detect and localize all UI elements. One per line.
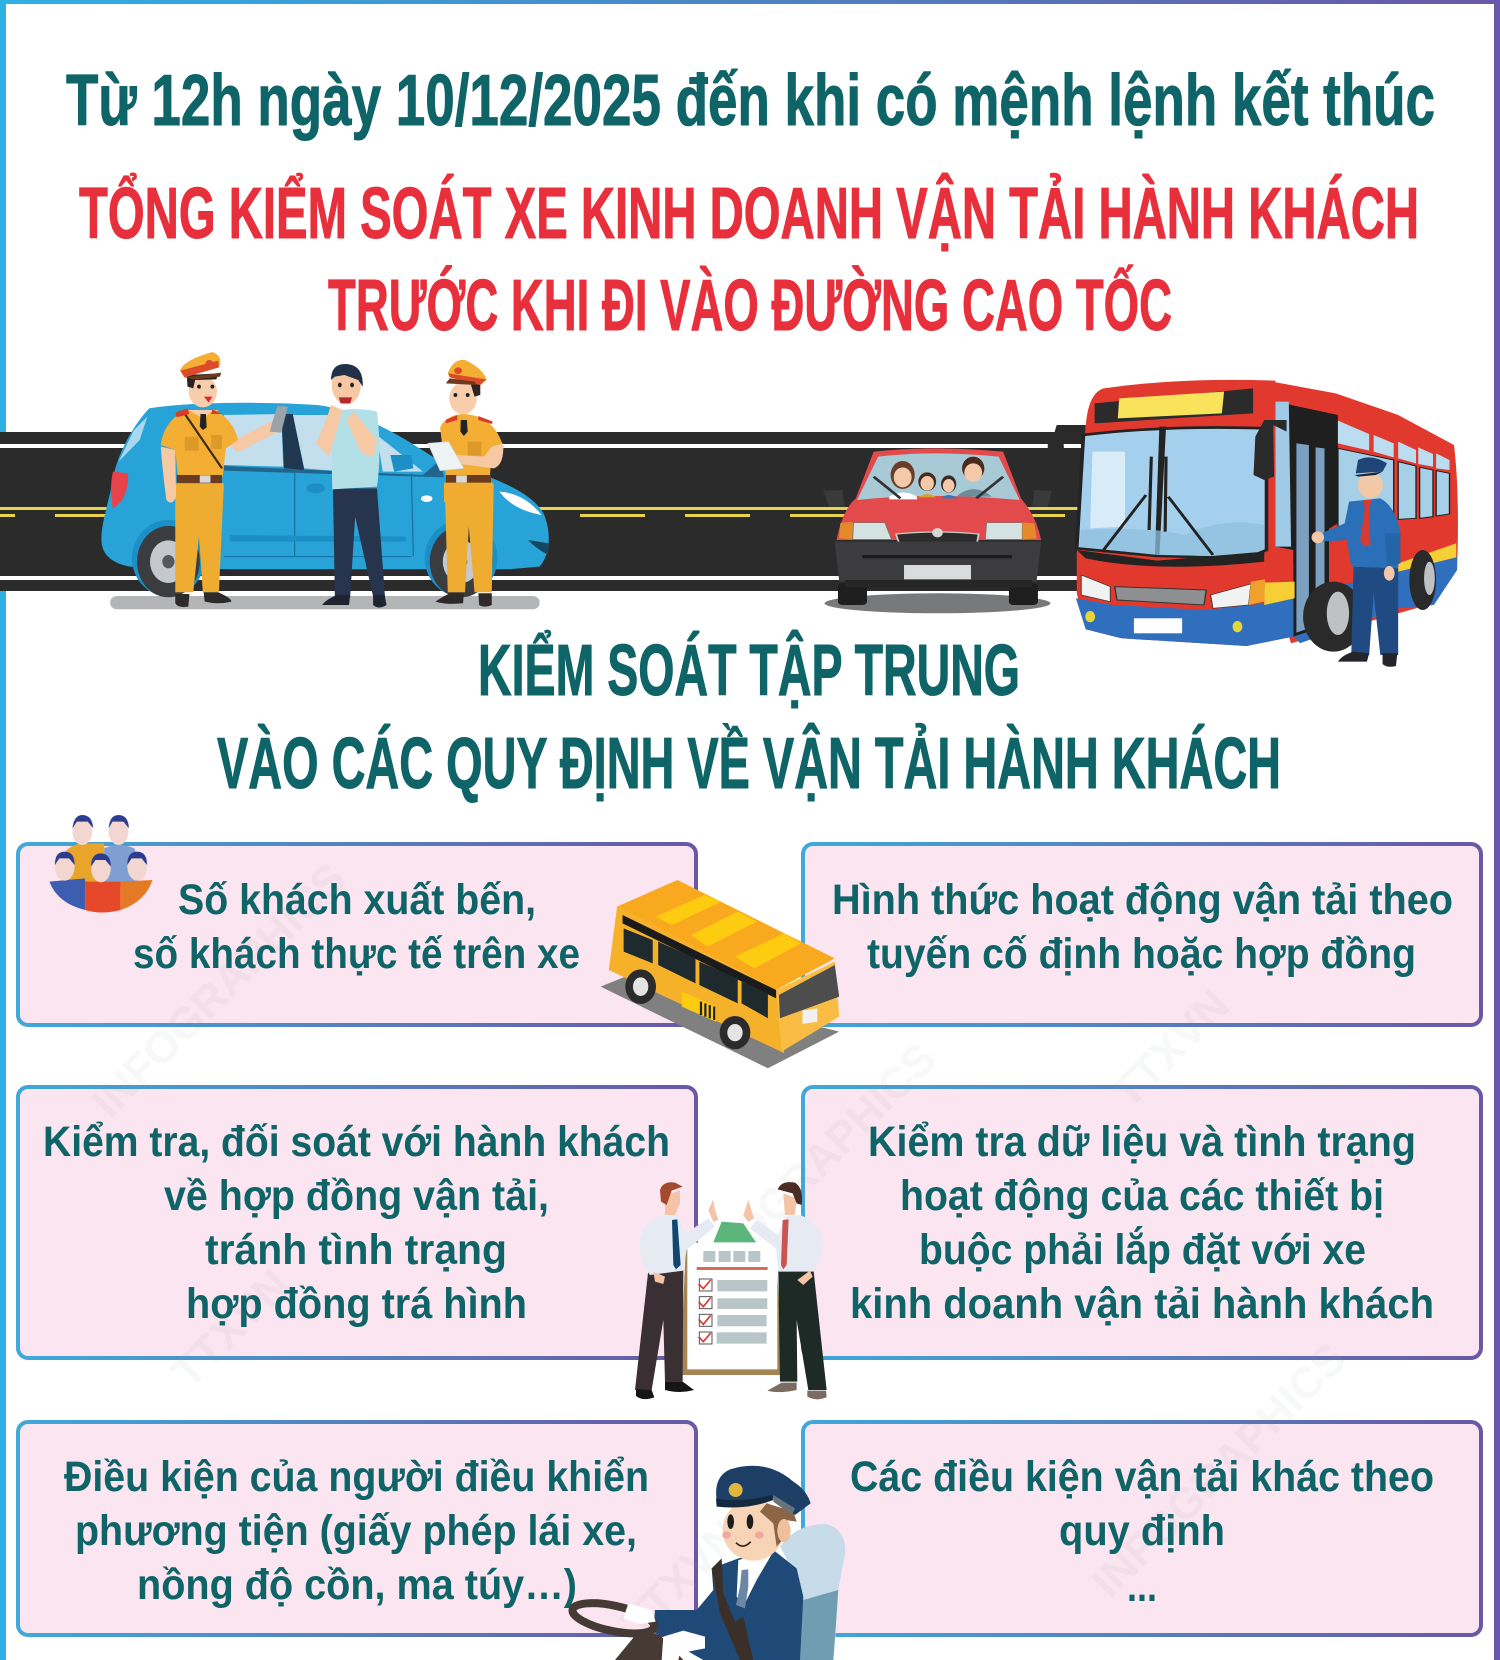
cap [716,1466,811,1515]
officer right [428,360,503,607]
mirror [1048,425,1086,482]
panel: contract verification: về hợp đồng vận tải, [164,1172,549,1220]
panel: other conditions: quy định [1059,1507,1225,1555]
heading: focus of control [217,630,1281,804]
bus front [1077,380,1293,646]
illustration: two men with checklist [635,1182,827,1399]
panel: other conditions [803,1422,1481,1635]
watermark: TTXVN [612,1510,749,1647]
steering wheel and hands [615,1632,683,1660]
ground shadow [110,596,540,609]
head [723,1499,784,1561]
illustration: red city bus with conductor [1048,380,1458,667]
panel: device data [803,1087,1481,1358]
man right [743,1182,827,1399]
panel: passenger count: Số khách xuất bến, [178,876,536,924]
panel: passenger count: số khách thực tế trên xe [133,930,580,978]
icon: group of passengers [49,815,152,912]
panel: driver conditions [18,1422,696,1635]
anxious man [316,364,387,607]
officer left [161,352,288,607]
panel: transport operation form [803,844,1481,1025]
panel: device data: hoạt động của các thiết bị [900,1172,1384,1220]
illustration: red family car [823,448,1052,613]
watermark: INFOGRAPHICS [1082,1334,1356,1607]
panel: transport operation form: tuyến cố định hoặc hợp đồng [867,930,1416,978]
icon: blue car [101,403,549,597]
watermark: TTXVN [162,1260,299,1397]
body [653,1550,803,1660]
panel: contract verification: Kiểm tra, đối soát với hành khách [43,1118,670,1166]
bus side [1264,381,1458,643]
watermark: INFOGRAPHICS [672,1034,946,1307]
title: main red heading [79,173,1419,346]
road [0,432,1110,591]
panel: driver conditions: nồng độ cồn, ma túy…) [137,1561,577,1609]
seat [780,1524,845,1660]
heading: focus of control: KIỂM SOÁT TẬP TRUNG [478,630,1020,711]
panel: contract verification [18,1087,696,1358]
panel: device data: buộc phải lắp đặt với xe [919,1225,1366,1274]
watermark [82,854,1356,1647]
panel: driver conditions: Điều kiện của người điều khiển [64,1453,649,1501]
panel: other conditions: Các điều kiện vận tải khác theo [850,1453,1434,1501]
panel: passenger count [18,844,696,1025]
icon: yellow isometric bus [601,880,839,1068]
panel: contract verification: tránh tình trạng [205,1226,507,1274]
watermark: INFOGRAPHICS [82,854,356,1127]
checklist board [680,1222,783,1375]
panel: other conditions: ... [1127,1563,1157,1611]
panel: device data: kinh doanh vận tải hành khách [850,1280,1434,1328]
man left [635,1182,718,1399]
panel: device data: Kiểm tra dữ liệu và tình trạng [868,1118,1416,1166]
illustration: police checking blue car [101,352,549,609]
panel: transport operation form: Hình thức hoạt động vận tải theo [832,876,1453,924]
illustration: bus driver [570,1466,845,1660]
passengers [874,457,1003,499]
panel: contract verification: hợp đồng trá hình [186,1280,527,1328]
watermark: TTXVN [1102,980,1239,1117]
conductor [1312,457,1400,667]
panel: driver conditions: phương tiện (giấy phép lái xe, [75,1507,637,1555]
